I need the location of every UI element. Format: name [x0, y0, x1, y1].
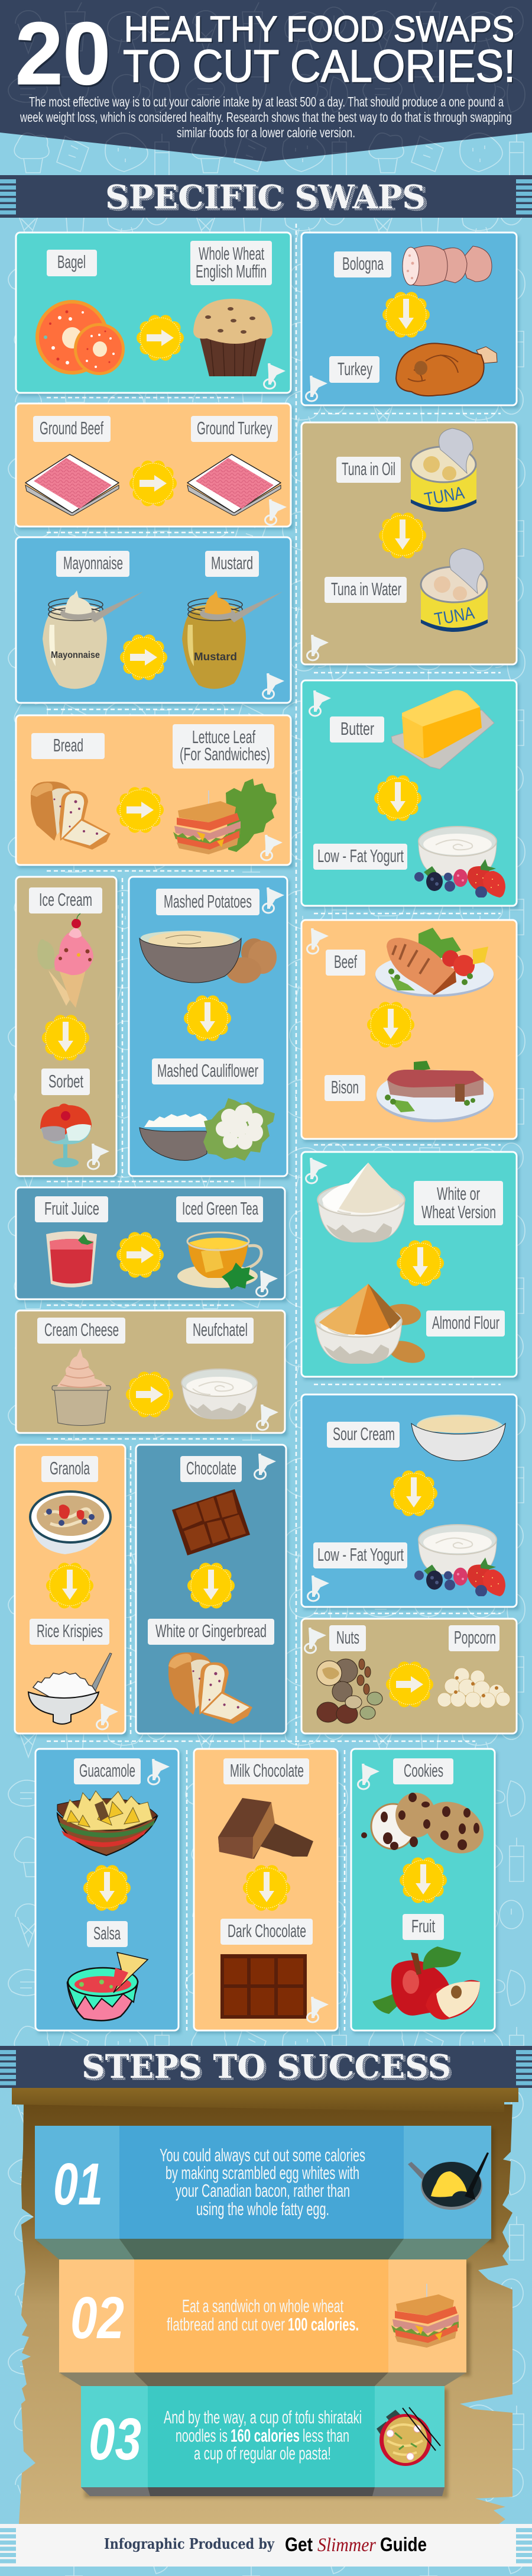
label: White or Wheat Version: [414, 1181, 503, 1225]
label: Guacamole: Guacamole: [79, 1760, 135, 1781]
label: Neufchatel: [186, 1318, 254, 1344]
label: Dark Chocolate: [220, 1919, 313, 1945]
logo: Get Slimmer Guide: Get: [285, 2533, 313, 2555]
panel: mayonnaise to mustard: [16, 537, 291, 703]
number 03: 03: [89, 2406, 141, 2472]
icon: neufchatel bowl: [181, 1369, 257, 1419]
panel: cookies to fruit: [351, 1749, 495, 2031]
label: Bologna: [334, 251, 391, 277]
label: Whole Wheat English Muffin: [190, 241, 272, 285]
icon: flag: [307, 1997, 329, 2022]
icon: flag: [306, 376, 327, 401]
icon: sour cream bowl: [411, 1415, 505, 1461]
label: Ground Turkey: [191, 416, 278, 442]
label: Bison: [325, 1075, 365, 1101]
step 2 text: Eat a sandwich on whole wheat: [182, 2296, 343, 2316]
icon: flag: [261, 835, 283, 860]
icon: mustard jar: [182, 590, 283, 689]
label: Bread: Bread: [53, 735, 83, 756]
icon: yogurt with berries: [414, 827, 505, 898]
panel: ground beef to ground turkey: [16, 403, 291, 527]
label: Sorbet: Sorbet: [48, 1071, 83, 1092]
icon: steak plate: [375, 928, 494, 997]
icon: flour bowl: [317, 1163, 405, 1242]
step 3 text: And by the way, a cup of tofu shirataki: [164, 2407, 362, 2427]
panel: beef to bison: [301, 920, 517, 1139]
label: Bison: Bison: [331, 1077, 359, 1097]
icon: roast turkey: [396, 343, 497, 396]
footer: [0, 2524, 532, 2567]
banner: steps to success: [0, 2046, 532, 2088]
icon: popcorn: [437, 1668, 510, 1708]
icon: flag: [254, 1454, 276, 1479]
icon: apple: [372, 1946, 480, 2020]
label: Butter: Butter: [340, 718, 374, 739]
label: Salsa: Salsa: [93, 1923, 121, 1944]
label: Mustard: Mustard: [211, 553, 253, 573]
icon: tuna can in oil: [411, 428, 476, 512]
panel: ice cream to sorbet: [16, 877, 116, 1176]
label: Low - Fat Yogurt: Low - Fat Yogurt: [317, 1544, 404, 1565]
panel: bagel to whole wheat english muffin: [16, 233, 291, 393]
icon: flag: [307, 1576, 329, 1601]
icon: bagel: [35, 300, 125, 375]
icon: sorbet: [40, 1103, 92, 1167]
step 2 text: 100 calories.: [288, 2314, 359, 2335]
panel: granola to rice krispies: [15, 1445, 125, 1734]
label: Whole Wheat English Muffin: Whole Wheat: [199, 243, 264, 264]
icon: milk chocolate pieces: [218, 1798, 313, 1859]
label: Mayonnaise: [56, 551, 129, 577]
label: Mashed Cauliflower: [152, 1058, 264, 1084]
icon: tuna can in water: TUNA: [433, 603, 476, 630]
icon: frying pan: [408, 2152, 489, 2210]
label: Popcorn: Popcorn: [454, 1627, 496, 1648]
label: Salsa: [87, 1921, 128, 1947]
number 02: 02: [70, 2285, 124, 2351]
label: Mashed Potatoes: Mashed Potatoes: [164, 891, 252, 912]
label: Ground Beef: [33, 416, 111, 442]
label: Mustard: [205, 551, 259, 577]
label: Granola: [41, 1456, 98, 1482]
icon: flag: [358, 1764, 379, 1789]
title: 20: [17, 5, 112, 105]
icon: yogurt with berries: [414, 1525, 505, 1597]
label: Lettuce Leaf (For Sandwiches): (For Sandwiches): [180, 744, 270, 764]
label: Cookies: [393, 1758, 453, 1784]
label: Iced Green Tea: Iced Green Tea: [182, 1198, 258, 1219]
label: Chocolate: Chocolate: [186, 1458, 236, 1479]
icon: mayonnaise jar: Mayonnaise: [51, 650, 100, 660]
icon: flag: [306, 1158, 327, 1183]
icon: nuts: [317, 1659, 382, 1723]
label: Lettuce Leaf (For Sandwiches): Lettuce Leaf: [192, 727, 255, 747]
icon: bread loaf: [168, 1652, 252, 1724]
panel: butter to low-fat yogurt: [301, 680, 517, 906]
panel: white or wheat flour to almond flour: [301, 1152, 517, 1377]
step 1: [35, 2126, 491, 2259]
step 1 text: using the whole fatty egg.: [196, 2199, 329, 2219]
label: Cookies: Cookies: [404, 1760, 443, 1781]
title: HEALTHY FOOD SWAPS: [124, 9, 514, 49]
label: Guacamole: [74, 1758, 141, 1784]
logo: Get Slimmer Guide: Slimmer: [317, 2535, 376, 2556]
label: Nuts: Nuts: [336, 1627, 359, 1648]
label: Bologna: Bologna: [342, 253, 384, 274]
label: Fruit Juice: Fruit Juice: [44, 1198, 99, 1219]
icon: bread loaf: [31, 782, 111, 850]
panel: bread to lettuce leaf: [16, 715, 291, 865]
step 3 text: 160 calories: [231, 2425, 300, 2446]
panel: tuna in oil to tuna in water: [301, 422, 517, 664]
step 3 text: [164, 2407, 362, 2464]
panel: chocolate to white or gingerbread: [136, 1445, 286, 1734]
title: 20: [15, 4, 111, 103]
label: Tuna in Water: Tuna in Water: [331, 579, 401, 599]
label: Iced Green Tea: [176, 1196, 263, 1222]
icon: iced tea: [177, 1232, 261, 1290]
torn paper background: [12, 2088, 518, 2524]
panel: nuts to popcorn: [301, 1619, 517, 1734]
label: Tuna in Water: [325, 577, 407, 603]
step 2 text: [167, 2296, 359, 2335]
label: Ice Cream: Ice Cream: [39, 889, 92, 910]
panel: bologna to turkey: [301, 233, 517, 405]
label: Mashed Potatoes: [156, 889, 259, 915]
icon: flag: [307, 928, 329, 954]
panel: milk chocolate to dark chocolate: [194, 1749, 338, 2031]
label: Beef: [326, 950, 365, 976]
step 2: [59, 2259, 466, 2386]
icon: tuna can in water: [421, 548, 488, 632]
label: Bread: [31, 733, 105, 759]
label: Tuna in Oil: Tuna in Oil: [342, 459, 395, 479]
icon: flag: [262, 887, 284, 913]
header banner: [0, 0, 532, 162]
icon: bison plate: [377, 1061, 494, 1122]
step 3 text: noodles is: [176, 2425, 228, 2446]
label: Milk Chocolate: Milk Chocolate: [230, 1760, 304, 1781]
icon: muffin: [193, 299, 273, 376]
label: Cream Cheese: Cream Cheese: [44, 1319, 119, 1340]
label: Popcorn: [449, 1625, 499, 1651]
icon: chocolate bar tilted: [172, 1489, 250, 1555]
label: Turkey: [329, 356, 379, 383]
icon: fruit juice: [46, 1231, 97, 1287]
icon: flag: [305, 1628, 326, 1653]
panel: guacamole to salsa: [35, 1749, 179, 2031]
label: Low - Fat Yogurt: Low - Fat Yogurt: [317, 845, 404, 866]
label: Butter: [330, 716, 384, 743]
label: Ground Turkey: Ground Turkey: [197, 418, 272, 438]
label: Sour Cream: [327, 1422, 400, 1448]
section banner: specific swaps: SPECIFIC SWAPS: [107, 179, 429, 218]
panel: mashed potatoes to mashed cauliflower: [129, 877, 287, 1176]
icon: flag: [262, 673, 284, 699]
intro text: [20, 94, 512, 140]
section banner: specific swaps: [0, 175, 532, 218]
label: Rice Krispies: [30, 1619, 109, 1645]
step 2 text: flatbread and cut over: [167, 2314, 285, 2335]
icon: flag: [148, 1759, 170, 1784]
label: Fruit: [403, 1914, 444, 1940]
label: Fruit Juice: [35, 1196, 108, 1222]
icon: cookies: [361, 1791, 493, 1864]
icon: granola bowl: [30, 1492, 111, 1554]
step 1 text: your Canadian bacon, rather than: [176, 2180, 350, 2201]
label: Chocolate: [180, 1456, 242, 1482]
icon: rice krispies bowl: [28, 1653, 112, 1724]
label: White or Wheat Version: White or: [437, 1183, 480, 1204]
label: Low - Fat Yogurt: [313, 1542, 407, 1568]
logo: Get Slimmer Guide: Guide: [380, 2533, 427, 2555]
icon: nachos bowl: [57, 1791, 157, 1855]
panel: fruit juice to iced green tea: [16, 1187, 285, 1299]
label: Ground Beef: Ground Beef: [40, 418, 103, 438]
icon: ground beef tray: [25, 454, 119, 515]
icon: noodle bowl: [377, 2407, 440, 2466]
title: HEALTHY FOOD SWAPS: [125, 10, 515, 50]
step 1 text: by making scrambled egg whites with: [166, 2162, 359, 2183]
label: Tuna in Oil: [336, 457, 401, 483]
icon: ground turkey tray: [187, 454, 281, 515]
label: Neufchatel: Neufchatel: [193, 1319, 248, 1340]
label: Sour Cream: Sour Cream: [333, 1423, 395, 1444]
section banner: specific swaps: SPECIFIC SWAPS: [105, 177, 426, 216]
step 3 text: less than: [303, 2425, 349, 2446]
label: Granola: Granola: [50, 1458, 90, 1479]
label: Almond Flour: [426, 1310, 505, 1337]
icon: mashed potatoes: [140, 931, 277, 983]
label: Lettuce Leaf (For Sandwiches): [173, 724, 274, 769]
credit text: Infographic Produced by: [104, 2535, 275, 2552]
banner: steps to success: STEPS TO SUCCESS: [82, 2047, 451, 2086]
step 3: [81, 2386, 445, 2496]
icon: salsa bowl: [67, 1952, 148, 2020]
panel: sour cream to low-fat yogurt: [301, 1394, 517, 1607]
icon: almond flour bowl: [315, 1284, 427, 1367]
logo: Get Slimmer Guide: [285, 2533, 427, 2556]
label: Rice Krispies: Rice Krispies: [37, 1621, 103, 1641]
label: White or Gingerbread: [148, 1619, 274, 1645]
icon: flag: [265, 499, 287, 525]
icon: flag: [97, 1704, 118, 1729]
label: Mayonnaise: Mayonnaise: [63, 553, 123, 573]
icon: cream cheese cup: [52, 1348, 111, 1426]
icon: tuna can in oil: TUNA: [423, 483, 466, 509]
banner: steps to success: STEPS TO SUCCESS: [83, 2049, 453, 2087]
icon: mustard jar: Mustard: [194, 651, 237, 663]
icon: mayonnaise jar: [43, 590, 143, 689]
icon: sandwich: [391, 2284, 459, 2348]
icon: flag: [307, 635, 329, 660]
icon: flag: [264, 363, 286, 389]
label: Beef: Beef: [334, 951, 357, 972]
label: Turkey: Turkey: [338, 359, 372, 379]
icon: butter: [391, 690, 494, 769]
icon: flag: [257, 1271, 278, 1296]
label: Bagel: Bagel: [57, 251, 86, 272]
icon: dark chocolate bar: [220, 1954, 307, 2019]
icon: ice cream cone: [37, 913, 93, 1008]
intro text: similar foods for a lower calorie version.: [177, 125, 355, 140]
icon: bologna: [403, 246, 492, 286]
label: Whole Wheat English Muffin: English Muffin: [196, 261, 267, 282]
icon: flag: [87, 1144, 109, 1169]
title: [15, 4, 517, 105]
label: Bagel: [47, 250, 97, 276]
label: Fruit: Fruit: [411, 1916, 435, 1936]
label: Low - Fat Yogurt: [313, 844, 407, 870]
label: Ice Cream: [29, 887, 102, 913]
label: Nuts: [329, 1625, 366, 1651]
label: Dark Chocolate: Dark Chocolate: [228, 1920, 306, 1941]
label: Milk Chocolate: [223, 1758, 309, 1784]
label: Sorbet: [41, 1069, 90, 1095]
step 3 text: a cup of regular ole pasta!: [194, 2443, 331, 2464]
step 1 text: You could always cut out some calories: [160, 2145, 365, 2165]
number 01: 01: [53, 2151, 103, 2217]
step 1 text: [160, 2145, 365, 2219]
icon: flag: [310, 690, 331, 716]
icon: sandwich with lettuce: [173, 779, 277, 854]
panel: cream cheese to neufchatel: [16, 1310, 285, 1433]
label: Cream Cheese: [37, 1318, 125, 1344]
icon: flag: [257, 1405, 278, 1430]
label: Mashed Cauliflower: Mashed Cauliflower: [157, 1060, 258, 1081]
label: White or Gingerbread: White or Gingerbread: [155, 1621, 267, 1641]
icon: mashed cauliflower: [140, 1098, 275, 1161]
section: steps to success: [0, 2046, 532, 2524]
